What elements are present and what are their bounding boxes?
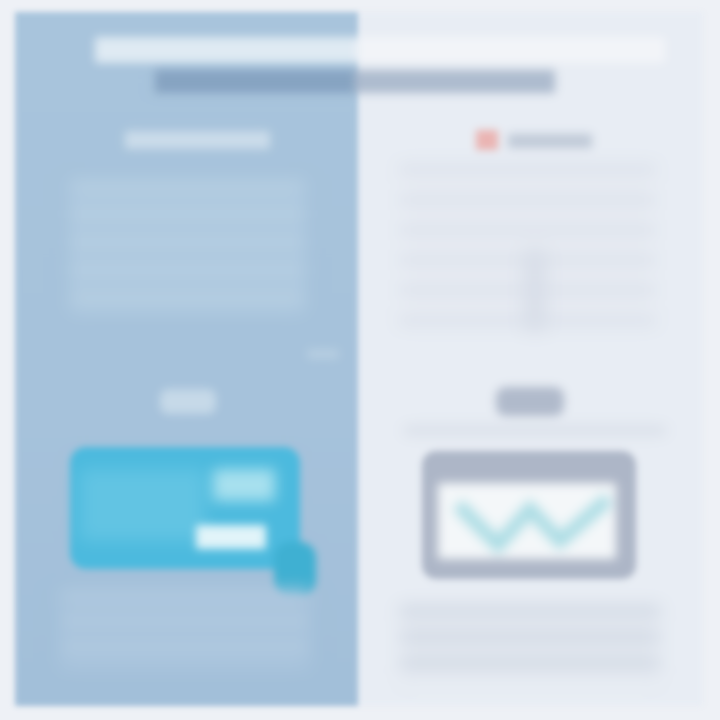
right divider mark: [524, 250, 546, 330]
card: cyan screen: [70, 447, 300, 569]
left text block: [70, 180, 305, 315]
icon: left section icon: [160, 389, 216, 414]
right heading text bar: [508, 134, 592, 148]
panel: left: [15, 12, 358, 706]
icon: teal badge: [274, 542, 316, 596]
subtitle bar: [155, 70, 555, 93]
title bar: [95, 37, 665, 63]
card upper white block: [213, 469, 275, 501]
left small note: [307, 349, 339, 359]
monitor: [422, 451, 636, 579]
screen chart: [450, 490, 616, 558]
card lower white block: [196, 525, 266, 549]
monitor screen: [438, 483, 616, 559]
panel: right: [358, 12, 703, 706]
left bottom text block: [60, 590, 310, 670]
right heading: [472, 126, 596, 154]
right text block: [400, 165, 655, 325]
right caption line: [405, 426, 665, 435]
icon: red marker: [476, 130, 498, 150]
right bottom text block: [400, 606, 660, 684]
left heading: [125, 131, 270, 149]
icon: right section icon: [496, 387, 564, 416]
card lighter area: [80, 469, 205, 541]
